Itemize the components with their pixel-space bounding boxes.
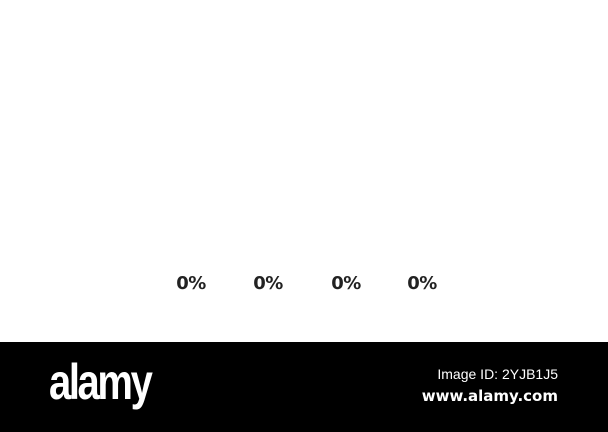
footer bar bbox=[0, 342, 608, 432]
label 1: 0% bbox=[176, 273, 206, 294]
label 2: 0% bbox=[253, 273, 283, 294]
label 4: 0% bbox=[407, 273, 437, 294]
label 3: 0% bbox=[331, 273, 361, 294]
percentage labels bbox=[176, 273, 437, 294]
logo: alamy: alamy bbox=[49, 354, 150, 410]
image id: Image ID: 2YJB1J5 bbox=[437, 366, 558, 382]
website: www.alamy.com bbox=[422, 387, 558, 405]
